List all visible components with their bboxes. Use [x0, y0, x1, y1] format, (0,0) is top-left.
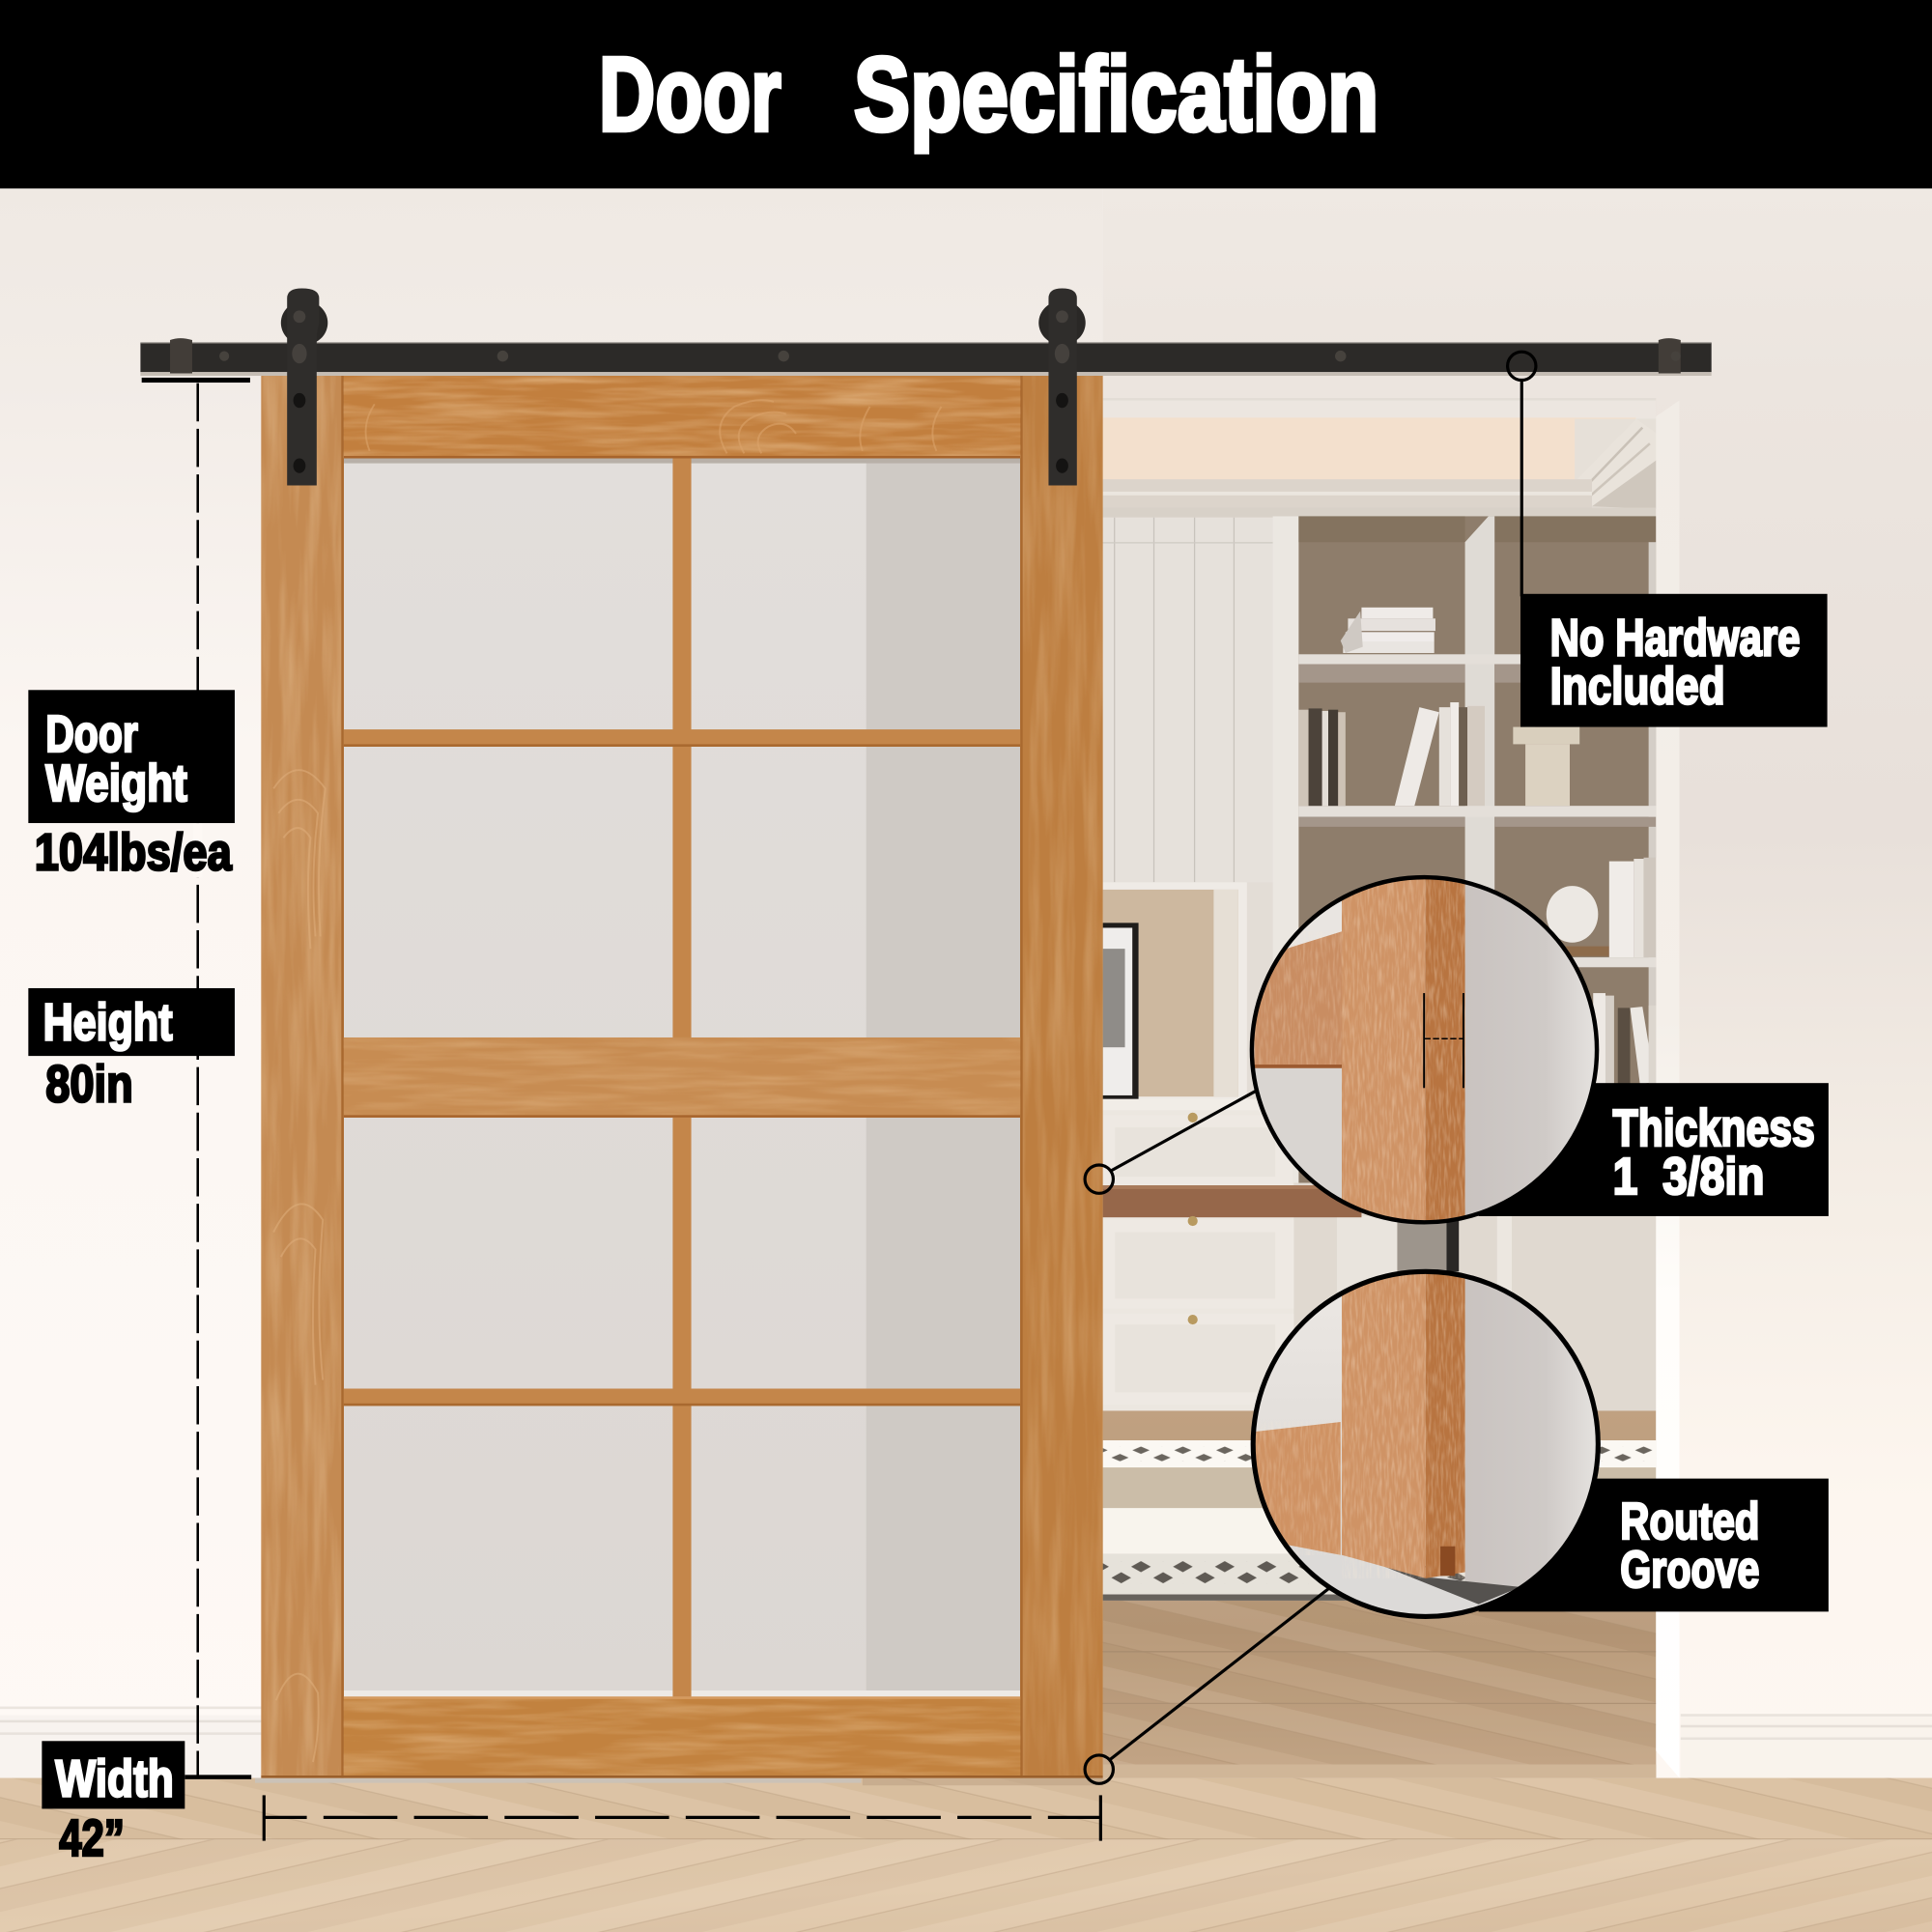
- room floor: [1103, 1410, 1656, 1778]
- barn door: [261, 376, 1103, 1778]
- vase and right books: [1547, 858, 1656, 1084]
- routed groove label: [1479, 1479, 1829, 1611]
- right stile: [1020, 376, 1103, 1778]
- routed groove label: Groove: [1620, 1542, 1759, 1599]
- callout line: no hardware: [1508, 352, 1536, 596]
- top rail: [344, 376, 1020, 458]
- books: horizontal stack: [1341, 608, 1435, 653]
- doorway return wall: [1656, 401, 1680, 1778]
- detail circle: routed groove: [1253, 1271, 1600, 1616]
- width label: Width: [55, 1751, 174, 1808]
- rail end: [1254, 931, 1342, 1222]
- left barn door hanger: [281, 288, 327, 486]
- thickness label: 1 3/8in: [1613, 1149, 1765, 1206]
- barn door track rail: [140, 338, 1712, 376]
- bookshelf unit: [1273, 516, 1656, 1188]
- floor: [1342, 1555, 1509, 1614]
- callout line: routed groove: [1085, 1587, 1331, 1783]
- stile face: [1342, 877, 1426, 1222]
- right barn door hanger: [1038, 288, 1086, 486]
- rug: [1103, 1440, 1656, 1601]
- no hardware label: [1520, 594, 1828, 727]
- no hardware label: No Hardware: [1550, 611, 1801, 668]
- height label: Height: [43, 995, 173, 1052]
- muntins: [344, 458, 1020, 1696]
- detail circle: door thickness: [1252, 877, 1598, 1222]
- left stile: [261, 376, 344, 1778]
- beadboard panel: [1103, 518, 1275, 882]
- door weight label: Weight: [45, 755, 187, 812]
- framed artwork: [1103, 882, 1247, 1100]
- books: upright centre group: [1395, 702, 1485, 806]
- no hardware label: Included: [1550, 658, 1725, 715]
- bottom rail: [344, 1696, 1020, 1778]
- door weight label: [28, 690, 235, 823]
- thickness measure: [1423, 993, 1464, 1088]
- cabinets and desk: [1103, 1099, 1656, 1413]
- stile edge with groove: [1426, 1271, 1465, 1578]
- routed groove label: Routed: [1620, 1493, 1759, 1550]
- title: [599, 36, 1378, 153]
- width value: 42”: [59, 1810, 125, 1867]
- doorway: room interior: [1103, 398, 1680, 1778]
- thickness label: [1479, 1083, 1829, 1216]
- stile face: [1342, 1271, 1426, 1578]
- rail end: [1254, 1422, 1341, 1555]
- width dimension line: [263, 1795, 1102, 1841]
- glass panes: [344, 458, 1020, 1696]
- thickness label: Thickness: [1613, 1100, 1815, 1157]
- middle rail: [344, 1037, 1020, 1118]
- height label: [28, 988, 235, 1056]
- title: Door: [599, 36, 781, 153]
- stile edge: [1426, 877, 1465, 1222]
- door weight label: Door: [45, 706, 138, 763]
- books: upright left group: [1298, 708, 1346, 806]
- door weight value: 104lbs/ea: [35, 825, 233, 882]
- title: Specification: [854, 36, 1378, 153]
- header bar: [0, 0, 1932, 188]
- height dimension line: [142, 378, 251, 1779]
- sculpture: [1513, 686, 1579, 806]
- callout line: thickness: [1085, 1091, 1257, 1193]
- height value: 80in: [45, 1056, 133, 1113]
